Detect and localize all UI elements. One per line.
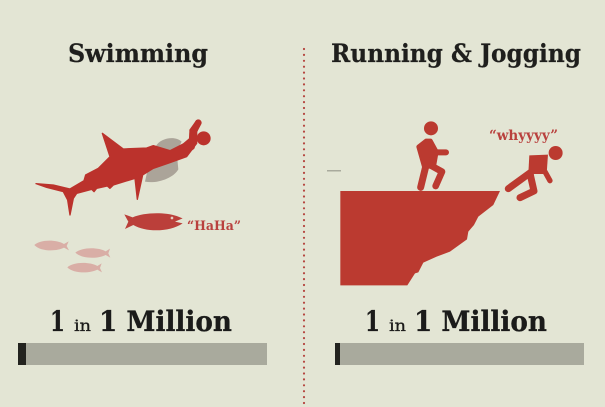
falling figure bbox=[508, 146, 563, 198]
label: whyyyy: “whyyyy” bbox=[489, 128, 558, 144]
cliff bbox=[340, 191, 500, 285]
stat: 1 in 1 Million, swimming: 1 Million bbox=[99, 305, 232, 338]
running figure bbox=[418, 121, 446, 187]
stat: 1 in 1 Million, running bbox=[365, 305, 547, 338]
stat: 1 in 1 Million, swimming: 1 bbox=[50, 305, 65, 338]
stat: 1 in 1 Million, running: in bbox=[389, 316, 406, 335]
stat: 1 in 1 Million, running: 1 Million bbox=[414, 305, 547, 338]
heading: Running & Jogging: Running & Jogging bbox=[331, 39, 581, 68]
pale fish 1 bbox=[34, 241, 69, 250]
swimmer head bbox=[197, 131, 211, 145]
illustration: cliff and runners bbox=[340, 121, 563, 285]
heading: Swimming: Swimming bbox=[68, 39, 208, 68]
label: HaHa: “HaHa” bbox=[187, 219, 241, 234]
divider: dotted line bbox=[303, 49, 305, 407]
icon: red fish bbox=[124, 213, 183, 230]
bar: swimming odds bbox=[18, 343, 267, 365]
pale fish 3 bbox=[67, 263, 102, 272]
mark: small dash bbox=[327, 170, 341, 172]
stat: 1 in 1 Million, swimming bbox=[50, 305, 232, 338]
stat: 1 in 1 Million, swimming: in bbox=[74, 316, 91, 335]
stat: 1 in 1 Million, running: 1 bbox=[365, 305, 380, 338]
pale fish 2 bbox=[75, 248, 110, 258]
illustration: shark attack bbox=[36, 121, 211, 215]
icon: school of pale fish bbox=[34, 241, 110, 272]
swimmer shadow bbox=[145, 138, 182, 182]
shark bbox=[36, 121, 200, 215]
bar: running odds bbox=[335, 343, 584, 365]
swimmer arm bbox=[177, 123, 198, 156]
